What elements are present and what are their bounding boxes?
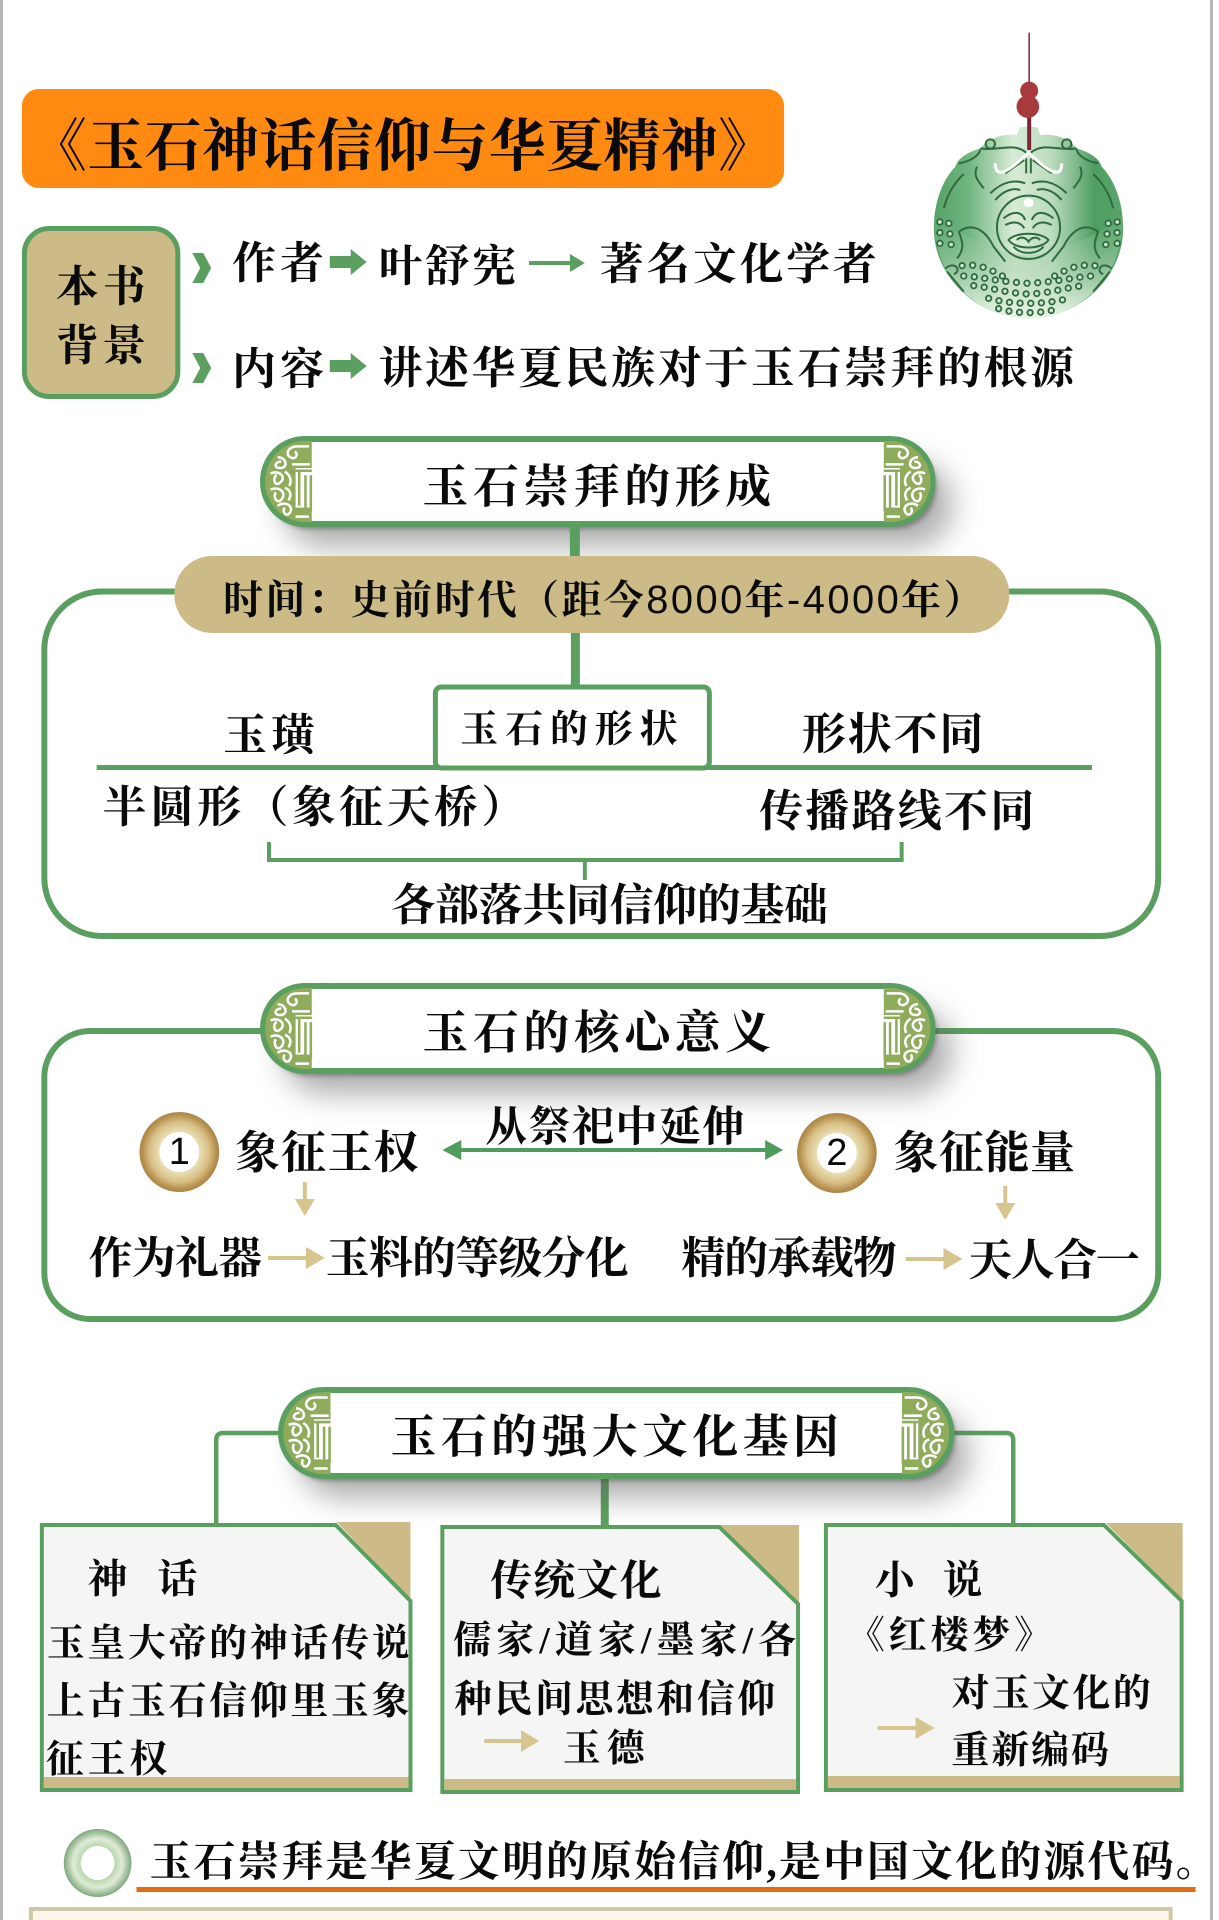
background row: author: 叶舒宪: [379, 242, 516, 291]
background row: content: 讲述华夏民族对于玉石崇拜的根源: [379, 344, 1077, 393]
card: novel: 重新编码: [951, 1730, 1109, 1772]
point 1: kingship: 象征王权: [235, 1128, 419, 1178]
divider with shape box: 玉石的形状: [460, 709, 679, 751]
text: different shape: 形状不同: [802, 710, 983, 759]
card: myth: [42, 1522, 410, 1790]
connectors to cards: [216, 1433, 1013, 1530]
card: myth: 上古玉石信仰里玉象: [47, 1681, 409, 1723]
summary conclusion: 玉石崇拜是华夏文明的原始信仰,是中国文化的源代码。: [149, 1839, 1217, 1886]
panel: core meaning: [44, 1031, 1158, 1319]
card: traditional culture: 种民间思想和信仰: [454, 1679, 775, 1721]
row: essence carrier to unity: 精的承载物: [681, 1234, 897, 1283]
panel: book background label: 本书: [56, 263, 147, 312]
text: jade huang: 玉璜: [223, 711, 316, 760]
card: novel: [826, 1523, 1183, 1790]
point 2: energy: 2: [826, 1132, 847, 1174]
bracket: [269, 842, 902, 880]
card: myth: 玉皇大帝的神话传说: [47, 1623, 409, 1665]
text: common belief base: 各部落共同信仰的基础: [392, 881, 828, 930]
card: myth: 神 话: [88, 1556, 197, 1602]
bottom strip: [31, 1909, 1171, 1920]
row: essence carrier to unity: [681, 1234, 1140, 1285]
card: traditional culture: 传统文化: [490, 1558, 662, 1605]
card: traditional culture: 玉德: [563, 1728, 648, 1770]
divider with shape box: [97, 687, 1092, 770]
row: ritual object to jade grade: 玉料的等级分化: [326, 1234, 629, 1283]
text: semi-circle: 半圆形（象征天桥）: [103, 783, 525, 832]
time bar: [174, 556, 1009, 633]
card: myth: 征王权: [46, 1739, 167, 1781]
time bar: 时间：史前时代（距今8000年-4000年）: [223, 577, 983, 623]
heading: core meaning banner: 玉石的核心意义: [422, 1007, 771, 1059]
row: ritual object to jade grade: 作为礼器: [89, 1234, 262, 1283]
heading: cultural gene banner: 玉石的强大文化基因: [391, 1411, 839, 1463]
panel: jade worship formation: [44, 592, 1158, 936]
point 1: kingship: [139, 1112, 419, 1216]
icon: jade pendant: [934, 33, 1123, 318]
background row: author: 作者: [232, 239, 324, 288]
double arrow from sacrifice: [442, 1104, 783, 1160]
row: ritual object to jade grade: [89, 1234, 629, 1283]
heading: formation banner: [263, 439, 952, 559]
point 2: energy: 象征能量: [894, 1128, 1075, 1178]
card: novel: 小 说: [875, 1557, 982, 1603]
title: [22, 89, 784, 188]
point 1: kingship: 1: [169, 1131, 190, 1173]
double arrow from sacrifice: 从祭祀中延伸: [485, 1104, 744, 1151]
background row: content: 内容: [232, 345, 324, 394]
card: novel: 对玉文化的: [951, 1673, 1151, 1715]
point 2: energy: [797, 1113, 1075, 1220]
heading: formation banner: 玉石崇拜的形成: [422, 461, 771, 513]
background row: author: [192, 239, 877, 291]
card: traditional culture: [442, 1525, 799, 1792]
background row: author: 著名文化学者: [600, 240, 877, 289]
title: 《玉石神话信仰与华夏精神》: [30, 115, 775, 179]
connector: [571, 630, 580, 688]
card: traditional culture: 儒家/道家/墨家/各: [453, 1620, 796, 1662]
row: essence carrier to unity: 天人合一: [968, 1236, 1140, 1285]
card: novel: 《红楼梦》: [847, 1615, 1052, 1657]
text: different routes: 传播路线不同: [759, 787, 1034, 836]
heading: cultural gene banner: [281, 1390, 969, 1498]
heading: core meaning banner: [263, 986, 952, 1094]
icon: pale jade ring: [64, 1829, 132, 1897]
panel: book background label: [24, 228, 178, 396]
panel: book background label: 背景: [56, 322, 147, 371]
